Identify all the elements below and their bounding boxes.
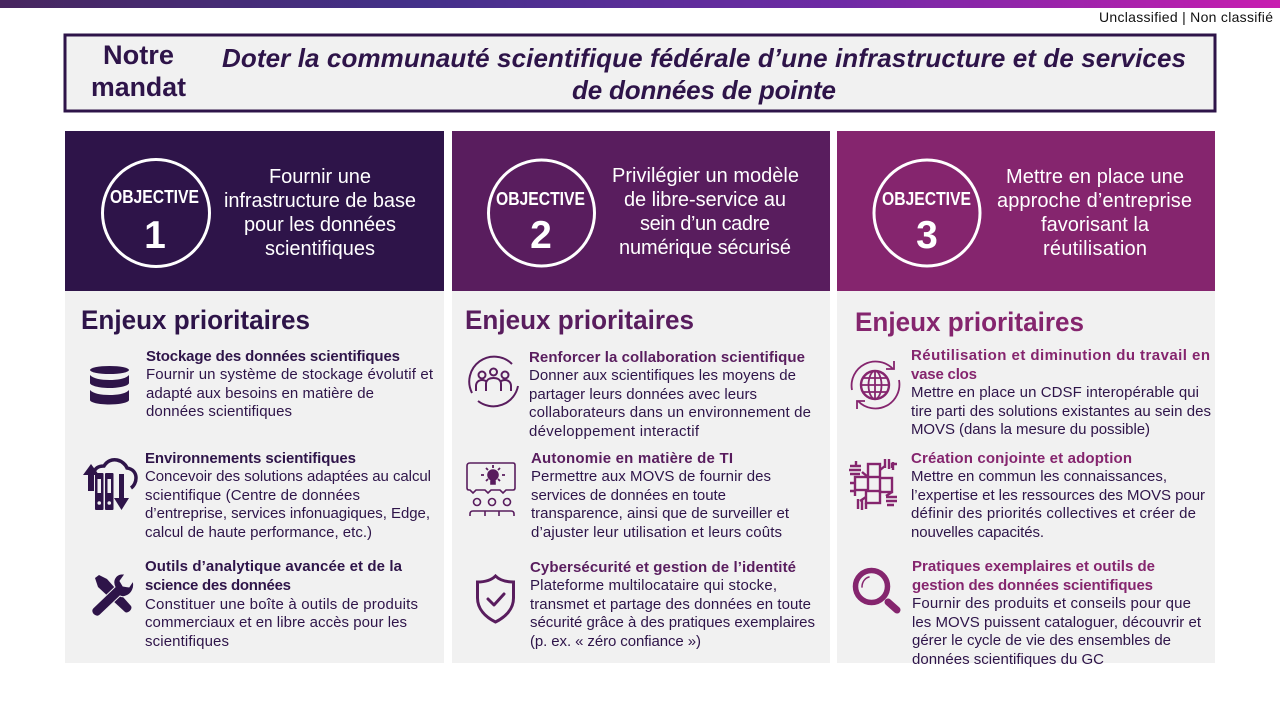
- objective 3 text: réutilisation: [1043, 238, 1147, 260]
- item: outils: Outils d’analytique avancée et de la: [145, 558, 403, 575]
- item: stockage: adapté aux besoins en matière de: [146, 385, 374, 402]
- item: reutilisation: Réutilisation et diminution du travail en: [911, 347, 1210, 364]
- objective 2 badge: OBJECTIVE: [496, 189, 585, 209]
- mandate statement: de données de pointe: [572, 75, 836, 105]
- classification label: Unclassified | Non classifié: [1099, 9, 1273, 25]
- item: creation conjointe: [911, 450, 1205, 541]
- item: outils: commerciaux et en libre accès pour les: [145, 614, 407, 631]
- objective 2 badge: [488, 160, 594, 266]
- mandate label: [91, 40, 186, 102]
- item: autonomie: d’ajuster leur utilisation et leurs coûts: [531, 524, 782, 541]
- mandate statement: Doter la communauté scientifique fédérale d’une infrastructure et de services: [222, 43, 1186, 73]
- item: creation conjointe: l’expertise et les ressources des MOVS pour: [911, 487, 1205, 504]
- item: pratiques exemplaires: Fournir des produits et conseils pour que: [912, 595, 1191, 612]
- objective 3 text: [997, 166, 1192, 260]
- item: cybersecurite: sécurité grâce à des pratiques exemplaires: [530, 614, 815, 631]
- item: outils: Constituer une boîte à outils de produits: [145, 596, 418, 613]
- item: autonomie: services de données en toute: [531, 487, 726, 504]
- item: collaboration: Donner aux scientifiques les moyens de: [529, 367, 796, 384]
- item: stockage: Fournir un système de stockage évolutif et: [146, 366, 434, 383]
- objective 3 text: Mettre en place une: [1006, 166, 1184, 188]
- mandate label: Notre: [103, 40, 174, 70]
- icon: database: [90, 366, 129, 404]
- icon: people in circle: [469, 357, 518, 406]
- heading: enjeux prioritaires 2: Enjeux prioritaires: [465, 305, 694, 335]
- icon: cloud with servers: [83, 460, 136, 510]
- item: pratiques exemplaires: Pratiques exemplaires et outils de: [912, 558, 1155, 575]
- objective 2 text: Privilégier un modèle: [612, 165, 799, 187]
- item: cybersecurite: [530, 559, 815, 650]
- item: outils: [145, 558, 418, 650]
- item: pratiques exemplaires: gérer le cycle de vie des ensembles de: [912, 632, 1171, 649]
- icon: globe with cycle arrows: [852, 361, 899, 409]
- item: reutilisation: tire parti des solutions existantes au sein des: [911, 403, 1211, 420]
- item: reutilisation: Mettre en place un CDSF interopérable qui: [911, 384, 1199, 401]
- item: cybersecurite: transmet et partage des données en toute: [530, 596, 811, 613]
- objective 3 text: favorisant la: [1041, 214, 1150, 236]
- panel: objective 1: [65, 131, 444, 663]
- item: stockage: Stockage des données scientifiques: [146, 348, 400, 365]
- item: pratiques exemplaires: [912, 558, 1202, 668]
- icon: tools: [92, 574, 134, 616]
- item: outils: scientifiques: [145, 633, 229, 650]
- objective 3 badge: [874, 160, 980, 266]
- item: environnements: Concevoir des solutions adaptées au calcul: [145, 468, 431, 485]
- objective 1 text: scientifiques: [265, 238, 375, 260]
- item: reutilisation: vase clos: [911, 366, 977, 383]
- objective 3 badge: OBJECTIVE: [882, 189, 971, 209]
- heading: enjeux prioritaires 1: Enjeux prioritaires: [81, 305, 310, 335]
- item: pratiques exemplaires: gestion des données scientifiques: [912, 577, 1153, 594]
- panel: objective 2: [452, 131, 830, 663]
- top gradient bar: [0, 0, 1280, 8]
- item: pratiques exemplaires: les MOVS puissent cataloguer, découvrir et: [912, 614, 1202, 631]
- objective 1 text: [224, 166, 416, 260]
- item: cybersecurite: Plateforme multilocataire qui stocke,: [530, 577, 777, 594]
- objective 2 text: numérique sécurisé: [619, 237, 791, 259]
- objective 1 badge: OBJECTIVE: [110, 187, 199, 207]
- objective 1 text: Fournir une: [269, 166, 371, 188]
- item: collaboration: [529, 349, 811, 440]
- item: reutilisation: MOVS (dans la mesure du possible): [911, 421, 1150, 438]
- item: autonomie: [531, 450, 790, 541]
- item: environnements: scientifique (Centre de données: [145, 487, 360, 504]
- item: stockage: [146, 348, 434, 420]
- item: creation conjointe: Mettre en commun les connaissances,: [911, 468, 1167, 485]
- objective 2 text: de libre-service au: [624, 189, 786, 211]
- item: collaboration: partager leurs données avec leurs: [529, 386, 757, 403]
- item: collaboration: collaborateurs dans un environnement de: [529, 404, 811, 421]
- objective 1 badge: [102, 160, 210, 266]
- icon: magnifying glass: [856, 570, 897, 610]
- item: reutilisation: [911, 347, 1211, 438]
- item: autonomie: Autonomie en matière de TI: [531, 450, 733, 467]
- item: environnements: calcul de haute performance, etc.): [145, 524, 372, 541]
- item: autonomie: Permettre aux MOVS de fournir des: [531, 468, 771, 485]
- item: environnements: [145, 450, 431, 541]
- mandate statement: [222, 43, 1186, 105]
- item: autonomie: transparence, ainsi que de surveiller et: [531, 505, 790, 522]
- item: creation conjointe: nouvelles capacités.: [911, 524, 1044, 541]
- icon: joined hands: [849, 459, 897, 510]
- objective 3 badge: 3: [916, 214, 938, 257]
- item: collaboration: Renforcer la collaboration scientifique: [529, 349, 805, 366]
- objective 2 badge: 2: [530, 214, 552, 257]
- objective 2 text: [612, 165, 799, 259]
- item: stockage: données scientifiques: [146, 403, 292, 420]
- item: cybersecurite: (p. ex. « zéro confiance »): [530, 633, 701, 650]
- item: pratiques exemplaires: données scientifiques du GC: [912, 651, 1104, 668]
- objective 2 header: [452, 131, 830, 291]
- item: creation conjointe: définir des priorités collectives et créer de: [911, 505, 1196, 522]
- objective 3 header: [837, 131, 1215, 291]
- heading: enjeux prioritaires 3: Enjeux prioritaires: [855, 307, 1084, 337]
- objective 2 text: sein d’un cadre: [640, 213, 770, 235]
- objective 3 text: approche d’entreprise: [997, 190, 1192, 212]
- item: cybersecurite: Cybersécurité et gestion de l’identité: [530, 559, 796, 576]
- objective 1 header: [65, 131, 444, 291]
- item: creation conjointe: Création conjointe et adoption: [911, 450, 1132, 467]
- objective 1 text: infrastructure de base: [224, 190, 416, 212]
- item: environnements: d’entreprise, services infonuagiques, Edge,: [145, 505, 430, 522]
- item: outils: science des données: [145, 577, 291, 594]
- mandate banner: [65, 35, 1215, 111]
- item: environnements: Environnements scientifiques: [145, 450, 356, 467]
- item: collaboration: développement interactif: [529, 423, 700, 440]
- objective 1 badge: 1: [144, 214, 166, 257]
- panel: objective 3: [837, 131, 1215, 668]
- icon: presentation with lightbulb: [467, 463, 515, 516]
- icon: shield: [478, 576, 514, 622]
- objective 1 text: pour les données: [244, 214, 396, 236]
- mandate label: mandat: [91, 72, 186, 102]
